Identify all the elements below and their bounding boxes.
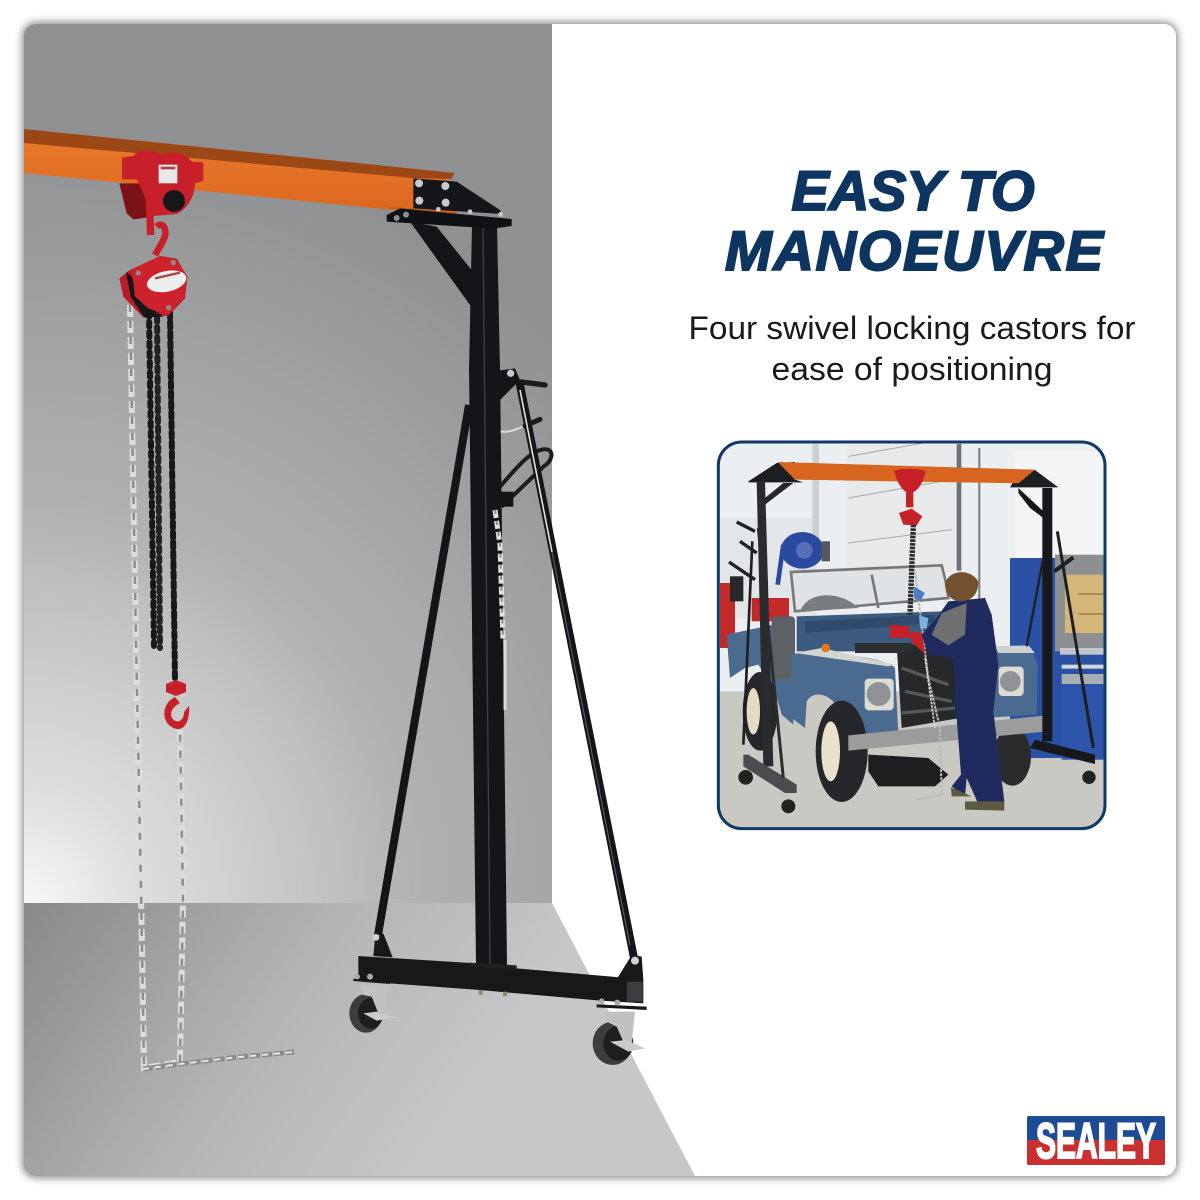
trolley (119, 150, 203, 219)
description text: Four swivel locking castors for (688, 310, 1136, 346)
left strut (378, 405, 469, 935)
hook (149, 198, 165, 255)
bumper (848, 715, 1047, 751)
base bar (353, 933, 647, 1010)
panel: studio floor (24, 903, 695, 1176)
base with castors (349, 933, 647, 1065)
title (725, 159, 1105, 282)
left castor (349, 983, 395, 1033)
beam (24, 129, 455, 212)
land rover (727, 565, 1038, 735)
wheels (743, 672, 1031, 802)
red equipment (720, 576, 789, 648)
load hook (164, 680, 189, 729)
handle rack (498, 368, 551, 507)
workshop chains (910, 525, 942, 800)
right strut (519, 380, 634, 958)
column (469, 225, 507, 965)
side chain and pin (495, 510, 505, 710)
gusset plate, top bar and brace (386, 178, 512, 305)
title: MANOEUVRE (725, 219, 1105, 282)
trolley and chain block (119, 150, 203, 317)
workshop gantry (729, 462, 1096, 813)
mechanic (914, 572, 1004, 811)
photo: crane in workshop (718, 438, 1107, 831)
hand chain (130, 305, 294, 1069)
panel: studio backdrop wall (24, 24, 552, 903)
description text: ease of positioning (772, 351, 1052, 387)
photo border (718, 442, 1105, 829)
title: EASY TO (792, 159, 1034, 222)
description text (688, 310, 1136, 387)
hose reel (778, 532, 830, 585)
gantry crane product (24, 129, 647, 1069)
chain block (119, 256, 188, 317)
right castor (593, 1012, 645, 1065)
workshop background (718, 438, 1105, 831)
workshop trolley and block (890, 469, 926, 655)
blue cabinets (1010, 555, 1107, 760)
load chain (149, 312, 175, 680)
